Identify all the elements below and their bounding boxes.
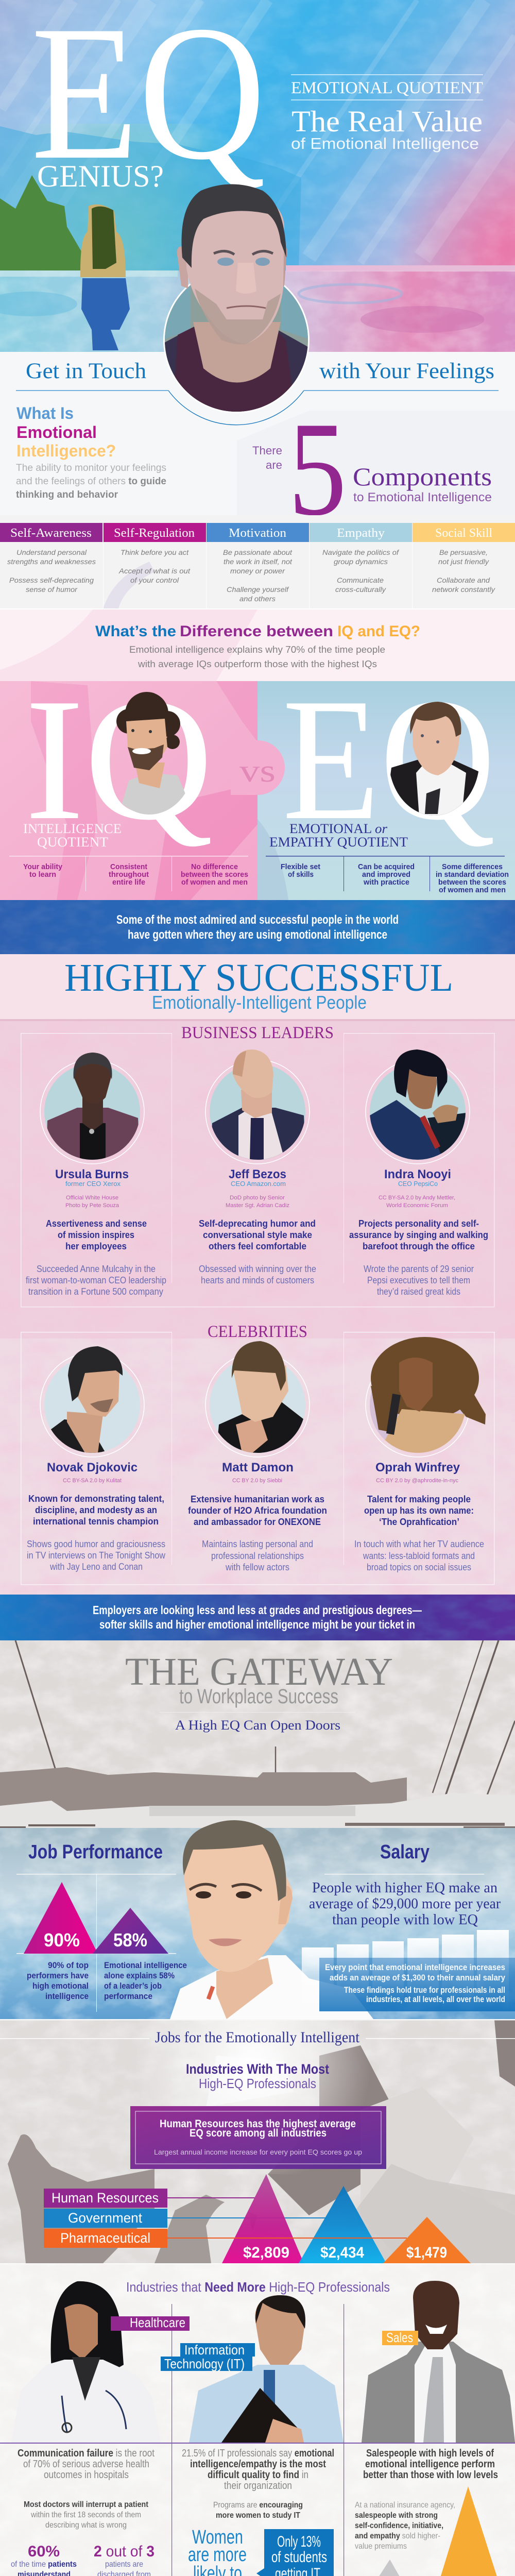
text block: what is emotional intelligence: thinking and behavior xyxy=(16,489,118,500)
chart: income triangles xyxy=(167,2174,471,2263)
key trait xyxy=(199,1218,316,1251)
callout: women high EQ: Women xyxy=(192,2527,243,2548)
heading: celebrities: CELEBRITIES xyxy=(208,1323,307,1341)
heading: Get in Touch with Your Feelings: Get in Touch xyxy=(26,359,146,383)
tag: healthcare: Healthcare xyxy=(130,2315,185,2330)
key trait xyxy=(349,1218,488,1251)
column: sales text xyxy=(348,2448,512,2576)
EQ traits: Some differences xyxy=(442,862,503,871)
text: salary claim xyxy=(309,1880,501,1928)
name: Jeff Bezos xyxy=(229,1167,286,1181)
callout: human resources highest: Human Resources has the highest average xyxy=(160,2118,356,2130)
portrait: Matt Damon xyxy=(205,1341,310,1457)
title: GENIUS?: GENIUS? xyxy=(37,159,164,193)
detail: hearts and minds of customers xyxy=(201,1275,314,1285)
column: Social Skill: Collaborate and xyxy=(437,576,490,584)
portrait: EQ man xyxy=(390,702,479,816)
detail: with Jay Leno and Conan xyxy=(49,1562,143,1572)
photo credit: Photo by Pete Souza xyxy=(65,1202,119,1209)
column: Social Skill: Be persuasive, xyxy=(439,548,488,556)
text block: 70 percent explanation: Emotional intelligence explains why 70% of the time people xyxy=(129,645,385,655)
portrait: Ursula Burns xyxy=(40,1053,144,1164)
key trait: Extensive humanitarian work as xyxy=(191,1494,324,1504)
heading: the gateway xyxy=(125,1650,393,1733)
card: Ursula Burns xyxy=(26,1053,166,1297)
subtitle block xyxy=(291,74,483,152)
tag: information technology xyxy=(161,2342,255,2371)
column: IT text: Programs are encouraging xyxy=(213,2501,303,2510)
column: sales text: self-confidence, initiative, xyxy=(355,2521,443,2530)
water xyxy=(0,1828,515,2019)
column: healthcare text: outcomes in hospitals xyxy=(44,2469,129,2481)
legend: industries: Pharmaceutical xyxy=(60,2230,150,2246)
panel: white intro background xyxy=(0,352,515,522)
key trait: her employees xyxy=(65,1241,127,1251)
text block: what is emotional intelligence: What Is xyxy=(16,404,74,422)
dividers xyxy=(0,2304,515,2576)
IQ traits: Consistent xyxy=(110,862,147,871)
role: CEO Amazon.com xyxy=(231,1180,286,1188)
key trait: conversational style make xyxy=(203,1230,312,1240)
name: Ursula Burns xyxy=(55,1167,129,1181)
column: healthcare text: within the first 18 seconds of them xyxy=(30,2511,141,2519)
heading: what's the difference: IQ and EQ? xyxy=(337,623,420,640)
column: Motivation: Be passionate about xyxy=(223,548,293,556)
EQ traits: Can be acquired xyxy=(358,862,415,871)
label: intelligence quotient xyxy=(23,821,122,850)
column: sales text: value premiums xyxy=(355,2542,407,2551)
column: Self-Regulation: of your control xyxy=(130,576,179,584)
detail: Obsessed with winning over the xyxy=(199,1264,316,1274)
chart: 90 percent triangle xyxy=(24,1882,98,1954)
heading: There are 5 Components: Components xyxy=(353,462,492,491)
portrait: Novak Djokovic xyxy=(40,1346,144,1457)
column: Self-Regulation: Think before you act xyxy=(121,548,189,556)
text: top performers: 90% of top xyxy=(48,1960,89,1970)
column: sales text: and empathy sold higher- xyxy=(355,2532,440,2540)
key trait: Talent for making people xyxy=(367,1494,471,1504)
hero portrait xyxy=(160,184,314,425)
IQ traits: entire life xyxy=(112,878,145,887)
card: Novak Djokovic xyxy=(27,1346,166,1572)
chart: income triangles: $1,479 xyxy=(406,2244,447,2261)
column: Self-Regulation: Self-Regulation xyxy=(114,527,195,540)
role: former CEO Xerox xyxy=(65,1180,121,1188)
heading: There are 5 Components: There xyxy=(252,444,282,457)
photo credit: DoD photo by Senior xyxy=(230,1195,285,1201)
stat: 2 out of 3 xyxy=(91,2543,158,2576)
detail: Maintains lasting personal and xyxy=(202,1539,313,1549)
key trait: discipline, and modesty as an xyxy=(35,1505,157,1515)
heading: jobs: Jobs for the Emotionally Intelligent xyxy=(155,2029,360,2046)
column: sales text: At a national insurance agency, xyxy=(355,2501,455,2510)
column: Motivation: the work in itself, not xyxy=(224,557,293,566)
IQ traits: to learn xyxy=(29,870,56,879)
heading: highly successful: HIGHLY SUCCESSFUL xyxy=(64,956,453,999)
tag: sales: Sales xyxy=(386,2330,413,2345)
detail: broad topics on social issues xyxy=(367,1562,471,1572)
column: Motivation: Motivation xyxy=(229,527,286,540)
column: Self-Regulation: Accept of what is out xyxy=(118,567,191,575)
IQ traits: of women and men xyxy=(181,878,248,887)
tag: information technology: Information xyxy=(184,2342,245,2358)
panel: industries that need more xyxy=(0,2263,515,2576)
label: intelligence quotient: INTELLIGENCE xyxy=(23,821,122,836)
marina trees and boats xyxy=(0,1767,515,1831)
text: leader performance xyxy=(104,1960,187,2001)
panel: IQ versus EQ xyxy=(0,662,515,900)
letters: EQ: EQ xyxy=(282,662,495,856)
detail: they’d raised great kids xyxy=(377,1286,460,1297)
detail: Succeeded Anne Mulcahy in the xyxy=(37,1264,156,1274)
photo: IT professional xyxy=(189,2295,344,2443)
callout: human resources highest: EQ score among all industries xyxy=(190,2127,327,2139)
detail xyxy=(202,1539,313,1572)
column: Empathy: group dynamics xyxy=(334,557,388,566)
column: healthcare text: Communication failure is the root xyxy=(18,2448,154,2459)
tag: information technology: Technology (IT) xyxy=(164,2356,245,2371)
column: Social Skill: network constantly xyxy=(432,585,495,594)
column: IT text: 21.5% of IT professionals say emotional xyxy=(182,2448,334,2459)
text: leader performance: of a leader’s job xyxy=(104,1981,162,1991)
photo credit: CC BY 2.0 by Siebbi xyxy=(232,1478,282,1484)
column: IT text: their organization xyxy=(224,2480,292,2492)
column: Self-Awareness: Possess self-deprecating xyxy=(9,576,94,584)
column: IT text xyxy=(182,2448,334,2576)
name: Novak Djokovic xyxy=(47,1461,138,1475)
letters: IQ: IQ xyxy=(25,662,213,856)
key trait: founder of H2O Africa foundation xyxy=(188,1505,327,1516)
label: emotional or empathy quotient: EMOTIONAL or xyxy=(289,821,388,836)
text block: what is emotional intelligence: The ability to monitor your feelings xyxy=(16,463,166,473)
panel: job performance xyxy=(16,1841,187,2012)
column: sales text: salespeople with strong xyxy=(355,2511,438,2520)
subtitle block: EMOTIONAL QUOTIENT xyxy=(291,79,483,97)
tag: healthcare xyxy=(111,2315,190,2331)
callout: only 13 percent: Only 13% xyxy=(277,2533,321,2550)
detail xyxy=(199,1264,316,1285)
chart: 58 percent triangle: 58% xyxy=(113,1929,147,1951)
vs badge: vs xyxy=(239,754,276,789)
heading: Industries that Need More High-EQ Professionals xyxy=(126,2279,390,2295)
banner: most admired people: Some of the most admired and successful people in the world xyxy=(116,913,399,927)
column: Self-Awareness: sense of humor xyxy=(26,585,78,594)
label: intelligence quotient: QUOTIENT xyxy=(37,835,108,850)
IQ traits: No difference xyxy=(191,862,238,871)
key trait: open up has its own name: xyxy=(364,1505,474,1516)
panel: people background xyxy=(0,1019,515,1595)
heading: business leaders: BUSINESS LEADERS xyxy=(181,1024,334,1042)
legend: industries xyxy=(44,2189,167,2248)
portrait: IQ man xyxy=(116,692,185,815)
column: Social Skill xyxy=(413,523,515,594)
chart: high EQ salespeople xyxy=(426,2486,512,2576)
column: Empathy xyxy=(310,523,412,594)
heading: There are 5 Components xyxy=(252,394,492,544)
EQ traits: with practice xyxy=(363,878,409,887)
hero mountains xyxy=(0,126,301,270)
stat: 60 percent: of the time patients xyxy=(11,2560,77,2569)
text block: what is emotional intelligence: Emotional xyxy=(16,423,97,442)
key trait xyxy=(28,1494,164,1527)
photo: doctor xyxy=(11,2281,161,2443)
heading: There are 5 Components: are xyxy=(266,459,282,471)
text block: what is emotional intelligence: Intelligence? xyxy=(16,442,116,460)
legend: industries: Government xyxy=(68,2210,142,2226)
heading: Get in Touch with Your Feelings: with Your Feelings xyxy=(319,359,494,383)
text: leader performance: alone explains 58% xyxy=(104,1971,175,1980)
photo credit xyxy=(379,1195,455,1209)
key trait: and ambassador for ONEXONE xyxy=(194,1517,321,1527)
callout: human resources highest xyxy=(130,2106,386,2169)
column: healthcare text: Most doctors will interrupt a patient xyxy=(24,2500,149,2509)
banner: employers xyxy=(0,1595,515,1640)
detail: with fellow actors xyxy=(225,1562,289,1572)
photo credit: Master Sgt. Adrian Cadiz xyxy=(226,1202,289,1209)
key trait: Assertiveness and sense xyxy=(46,1218,147,1229)
card: Jeff Bezos xyxy=(199,1049,316,1285)
heading: highly successful: Emotionally-Intelligent People xyxy=(152,992,367,1013)
column: healthcare text: of 70% of serious adverse health xyxy=(23,2459,149,2470)
text: top performers: intelligence xyxy=(45,1991,89,2001)
heading: Get in Touch with Your Feelings xyxy=(16,359,499,391)
key trait: assurance by singing and walking xyxy=(349,1230,488,1240)
portrait: Jeff Bezos xyxy=(205,1049,310,1164)
card: Indra Nooyi xyxy=(349,1049,488,1297)
detail: professional relationships xyxy=(211,1551,304,1561)
banner: most admired people xyxy=(0,900,515,954)
column: Empathy: cross-culturally xyxy=(335,585,386,594)
column: Self-Awareness xyxy=(0,523,102,594)
label: emotional or empathy quotient: EMPATHY QUOTIENT xyxy=(269,835,408,850)
key trait: Known for demonstrating talent, xyxy=(28,1494,164,1504)
name: Matt Damon xyxy=(222,1461,294,1475)
chart: low EQ salespeople xyxy=(348,2560,427,2576)
photo credit xyxy=(226,1195,289,1209)
photo credit: CC BY-SA 2.0 by Kulitat xyxy=(63,1478,122,1484)
key trait: ‘The Oprahfication’ xyxy=(379,1517,459,1527)
hero woman and reflection xyxy=(80,205,130,350)
text: salary claim: average of $29,000 more per year xyxy=(309,1896,501,1912)
heading: the gateway: to Workplace Success xyxy=(179,1685,338,1708)
heading: the gateway: THE GATEWAY xyxy=(125,1650,393,1693)
stat: 2 out of 3: patients are xyxy=(105,2560,143,2569)
heading: industries with the most: Industries With The Most xyxy=(186,2061,329,2077)
subtitle block: of Emotional Intelligence xyxy=(291,134,479,152)
detail: wants: less-tabloid formats and xyxy=(363,1551,475,1561)
panel: gateway xyxy=(0,1640,515,2019)
column: IT text: more women to study IT xyxy=(216,2511,300,2520)
column: Motivation: and others xyxy=(239,595,276,603)
role: CEO PepsiCo xyxy=(398,1180,438,1188)
column: Self-Awareness: strengths and weaknesses xyxy=(7,557,96,566)
heading: the gateway: A High EQ Can Open Doors xyxy=(175,1718,340,1733)
text: top performers xyxy=(27,1960,89,2001)
banner: employers: softer skills and higher emotional intelligence might be your ticket in xyxy=(99,1618,415,1631)
detail: In touch with what her TV audience xyxy=(354,1539,484,1549)
text block: 70 percent explanation: with average IQs outperform those with the highest IQs xyxy=(138,659,377,669)
photo credit: CC BY-SA 2.0 by Andy Mettler, xyxy=(379,1195,455,1201)
name: Indra Nooyi xyxy=(384,1167,451,1181)
photo credit xyxy=(65,1195,119,1209)
chart: 58 percent triangle xyxy=(93,1908,168,1954)
column: Self-Regulation xyxy=(104,523,206,584)
panel: hero xyxy=(0,0,515,352)
column: Empathy: Communicate xyxy=(337,576,384,584)
detail: Shows good humor and graciousness xyxy=(27,1539,165,1549)
column: healthcare text xyxy=(11,2448,158,2576)
key trait xyxy=(364,1494,474,1527)
heading: what's the difference: What’s the xyxy=(95,623,176,640)
heading: industries with the most xyxy=(186,2061,329,2091)
key trait: Projects personality and self- xyxy=(358,1218,479,1229)
callout: human resources highest: Largest annual income increase for every point EQ scores go up xyxy=(154,2148,362,2156)
portrait: gateway man xyxy=(170,1820,373,2019)
detail: in TV interviews on The Tonight Show xyxy=(27,1550,166,1561)
detail xyxy=(354,1539,484,1572)
column: Self-Awareness: Self-Awareness xyxy=(10,527,92,540)
name: Oprah Winfrey xyxy=(375,1461,460,1475)
panel: jobs for the emotionally intelligent xyxy=(0,1958,515,2263)
detail: first woman-to-woman CEO leadership xyxy=(26,1275,166,1285)
panel: difference between IQ and EQ intro xyxy=(0,609,515,681)
IQ traits: throughout xyxy=(109,870,149,879)
key trait: international tennis champion xyxy=(33,1516,159,1527)
photo credit: CC BY 2.0 by @aphrodite-in-nyc xyxy=(376,1478,458,1484)
column: Social Skill: Social Skill xyxy=(435,527,492,540)
column: Self-Awareness: Understand personal xyxy=(16,548,87,556)
background photo: feet and laptop xyxy=(8,2020,515,2263)
heading: There are 5 Components: to Emotional Intelligence xyxy=(353,490,492,504)
photo: salesman xyxy=(362,2281,515,2443)
text block: what is emotional intelligence xyxy=(16,404,166,500)
hero tree xyxy=(0,175,85,270)
key trait xyxy=(188,1494,327,1527)
EQ traits: Flexible set xyxy=(281,862,320,871)
detail: transition in a Fortune 500 company xyxy=(28,1286,163,1297)
heading: industries with the most: High-EQ Professionals xyxy=(199,2076,316,2091)
chart: 90 percent triangle: 90% xyxy=(44,1929,80,1951)
photo credit: World Economic Forum xyxy=(386,1202,448,1209)
portrait: Indra Nooyi xyxy=(366,1049,470,1164)
EQ traits: in standard deviation xyxy=(436,870,509,879)
key trait: barefoot through the office xyxy=(363,1241,475,1251)
callout: point increase xyxy=(319,1958,515,2011)
label: emotional or empathy quotient xyxy=(269,821,408,850)
column: sales text: emotional intelligence perform xyxy=(365,2459,495,2470)
EQ traits: between the scores xyxy=(438,878,506,887)
heading: There are 5 Components: 5 xyxy=(288,394,347,544)
detail xyxy=(27,1539,166,1572)
text: leader performance: performance xyxy=(104,1991,152,2001)
detail xyxy=(364,1264,474,1297)
text: salary claim: than people with low EQ xyxy=(332,1912,478,1928)
column: IT text: difficult quality to find in xyxy=(208,2469,308,2481)
column: Empathy: Empathy xyxy=(337,527,385,540)
subtitle block: The Real Value xyxy=(291,105,483,138)
column: Motivation xyxy=(207,523,309,603)
banner: employers: Employers are looking less and less at grades and prestigious degrees— xyxy=(93,1603,422,1617)
chart: rising bars xyxy=(302,1930,509,2012)
stat: 60 percent xyxy=(11,2543,77,2576)
column: Motivation: Challenge yourself xyxy=(227,585,289,594)
table: five components xyxy=(0,515,515,609)
text block: what is emotional intelligence: and the feelings of others to guide xyxy=(16,476,166,487)
column: IT text: intelligence/empathy is the most xyxy=(190,2459,326,2470)
EQ traits: and improved xyxy=(362,870,410,879)
column: healthcare text: describing what is wrong xyxy=(45,2521,127,2530)
EQ traits: of women and men xyxy=(439,886,506,894)
EQ traits: of skills xyxy=(288,870,314,879)
column: sales text: Salespeople with high levels of xyxy=(366,2448,494,2459)
vs badge xyxy=(230,740,285,795)
legend: industries: Human Resources xyxy=(52,2190,159,2206)
text: leader performance: Emotional intelligence xyxy=(104,1960,187,1970)
key trait xyxy=(46,1218,147,1251)
text: top performers: high emotional xyxy=(32,1981,89,1991)
column: Empathy: Navigate the politics of xyxy=(322,548,400,556)
stat: 2 out of 3: 2 out of 3 xyxy=(94,2543,154,2560)
key trait: others feel comfortable xyxy=(209,1241,306,1251)
column: Social Skill: not just friendly xyxy=(438,557,489,566)
IQ traits: between the scores xyxy=(181,870,248,879)
panel: salary xyxy=(302,1841,515,2012)
card: Matt Damon xyxy=(188,1341,327,1572)
heading: what's the difference: Difference between xyxy=(180,623,333,640)
callout: women high EQ xyxy=(186,2527,249,2576)
callout: only 13 percent xyxy=(256,2529,334,2576)
photo credit: Official White House xyxy=(66,1195,118,1201)
portrait: Oprah Winfrey xyxy=(366,1337,486,1457)
callout: women high EQ: are more xyxy=(188,2544,247,2566)
detail: Wrote the parents of 29 senior xyxy=(364,1264,474,1274)
chart: income triangles: $2,434 xyxy=(320,2244,364,2261)
stat: 60 percent: 60% xyxy=(28,2543,60,2560)
IQ traits xyxy=(9,856,248,891)
marina masts xyxy=(15,1640,515,1803)
card: Oprah Winfrey xyxy=(354,1337,486,1572)
EQ traits xyxy=(266,856,509,894)
heading: Salary xyxy=(380,1841,430,1863)
IQ traits: Your ability xyxy=(23,862,63,871)
banner: most admired people: have gotten where they are using emotional intelligence xyxy=(128,928,387,942)
heading: highly successful xyxy=(0,954,515,1019)
heading: Job Performance xyxy=(28,1841,163,1863)
detail: Pepsi executives to tell them xyxy=(367,1275,470,1285)
text block: 70 percent explanation xyxy=(129,645,385,669)
hero pool water xyxy=(0,265,515,352)
frame: celebrities xyxy=(21,1332,495,1585)
heading: what's the difference xyxy=(95,623,420,640)
detail xyxy=(26,1264,166,1297)
frame: business leaders xyxy=(21,1033,495,1308)
hero face xyxy=(177,184,287,344)
key trait: Self-deprecating humor and xyxy=(199,1218,316,1229)
column: Motivation: money or power xyxy=(230,567,285,575)
text: salary claim: People with higher EQ make an xyxy=(312,1880,497,1896)
text: top performers: performers have xyxy=(27,1971,89,1980)
callout: only 13 percent: of students xyxy=(271,2549,327,2566)
key trait: of mission inspires xyxy=(58,1230,134,1240)
chart: income triangles: $2,809 xyxy=(243,2244,289,2261)
